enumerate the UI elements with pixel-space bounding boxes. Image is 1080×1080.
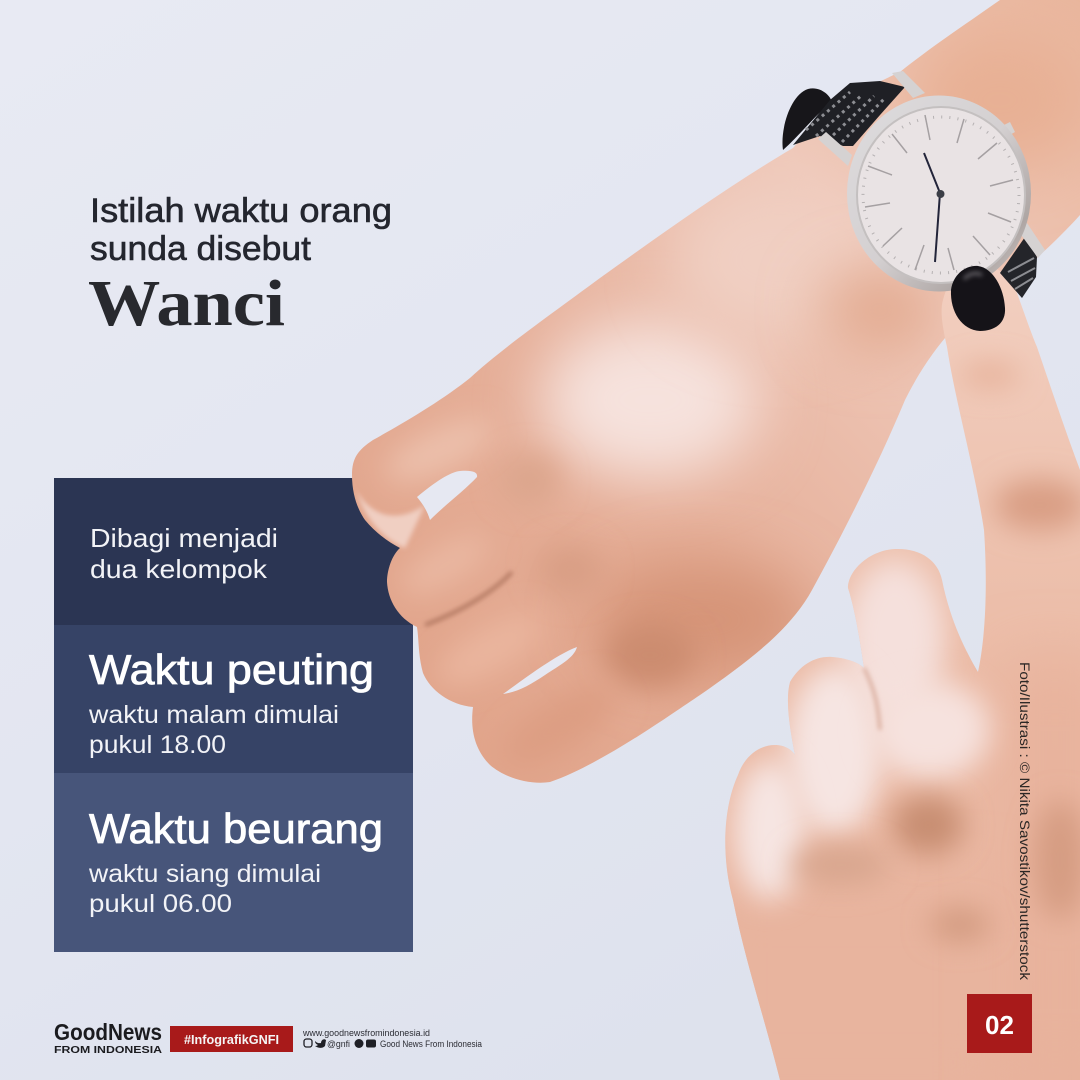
- social links: Good News From Indonesia: [380, 1039, 482, 1049]
- text: Waktu beurang: Waktu beurang: [89, 805, 383, 852]
- watch case: [847, 96, 1031, 292]
- heading: Wanci: [88, 267, 285, 340]
- hour markers: [865, 115, 1013, 270]
- heading: [88, 192, 392, 340]
- icon: youtube: [366, 1040, 376, 1048]
- text: Dibagi menjadi dua kelompok: dua kelompok: [90, 554, 268, 584]
- watch dial: [857, 107, 1025, 283]
- panel: Dibagi menjadi dua kelompok: [54, 478, 413, 625]
- heading: sunda disebut: [90, 230, 312, 268]
- logo: GoodNews From Indonesia: GoodNews: [54, 1019, 162, 1045]
- text: Waktu peuting: waktu malam dimulai: [88, 701, 339, 729]
- social links: www.goodnewsfromindonesia.id: [302, 1028, 430, 1038]
- text: Waktu beurang: [88, 805, 383, 918]
- icon: facebook: [354, 1039, 364, 1048]
- panel: Waktu peuting: [54, 625, 413, 773]
- logo: GoodNews From Indonesia: [54, 1019, 162, 1056]
- watch strap upper: [782, 81, 905, 150]
- icon: wristwatch: [782, 71, 1045, 298]
- photo credit: Foto/Ilustrasi : © Nikita Savostikov/shutterstock: [1017, 662, 1032, 980]
- watch lugs: [818, 71, 1045, 258]
- photo: pointing hand: [700, 264, 1080, 1080]
- text: Dibagi menjadi dua kelompok: Dibagi menjadi: [90, 523, 278, 553]
- gaps between fingers: [417, 471, 577, 694]
- text: Waktu beurang: waktu siang dimulai: [88, 860, 321, 888]
- page number badge: 02: [985, 1010, 1014, 1040]
- icon: twitter: [315, 1039, 326, 1048]
- watch strap lower: [1000, 237, 1037, 298]
- text: Waktu peuting: [88, 646, 374, 759]
- tag: InfografikGNFI: [170, 1026, 293, 1052]
- social links: [302, 1028, 482, 1049]
- icon: black fingernail: [951, 266, 1005, 331]
- tag: InfografikGNFI: #InfografikGNFI: [184, 1033, 279, 1047]
- watch hands: [924, 153, 940, 262]
- text: Dibagi menjadi dua kelompok: [90, 523, 278, 584]
- text: Waktu peuting: Waktu peuting: [89, 646, 374, 693]
- logo: GoodNews From Indonesia: FROM INDONESIA: [54, 1044, 162, 1056]
- text: Waktu peuting: pukul 18.00: [89, 731, 226, 759]
- minute ticks: [863, 117, 1019, 273]
- page number badge: [967, 994, 1032, 1053]
- photo: wrist and hand with watch: [352, 0, 1080, 783]
- panel: Waktu beurang: [54, 773, 413, 952]
- text: Waktu beurang: pukul 06.00: [89, 890, 232, 918]
- icon: instagram: [304, 1039, 312, 1047]
- heading: Istilah waktu orang: [90, 192, 392, 230]
- social links: @gnfi: [327, 1039, 350, 1049]
